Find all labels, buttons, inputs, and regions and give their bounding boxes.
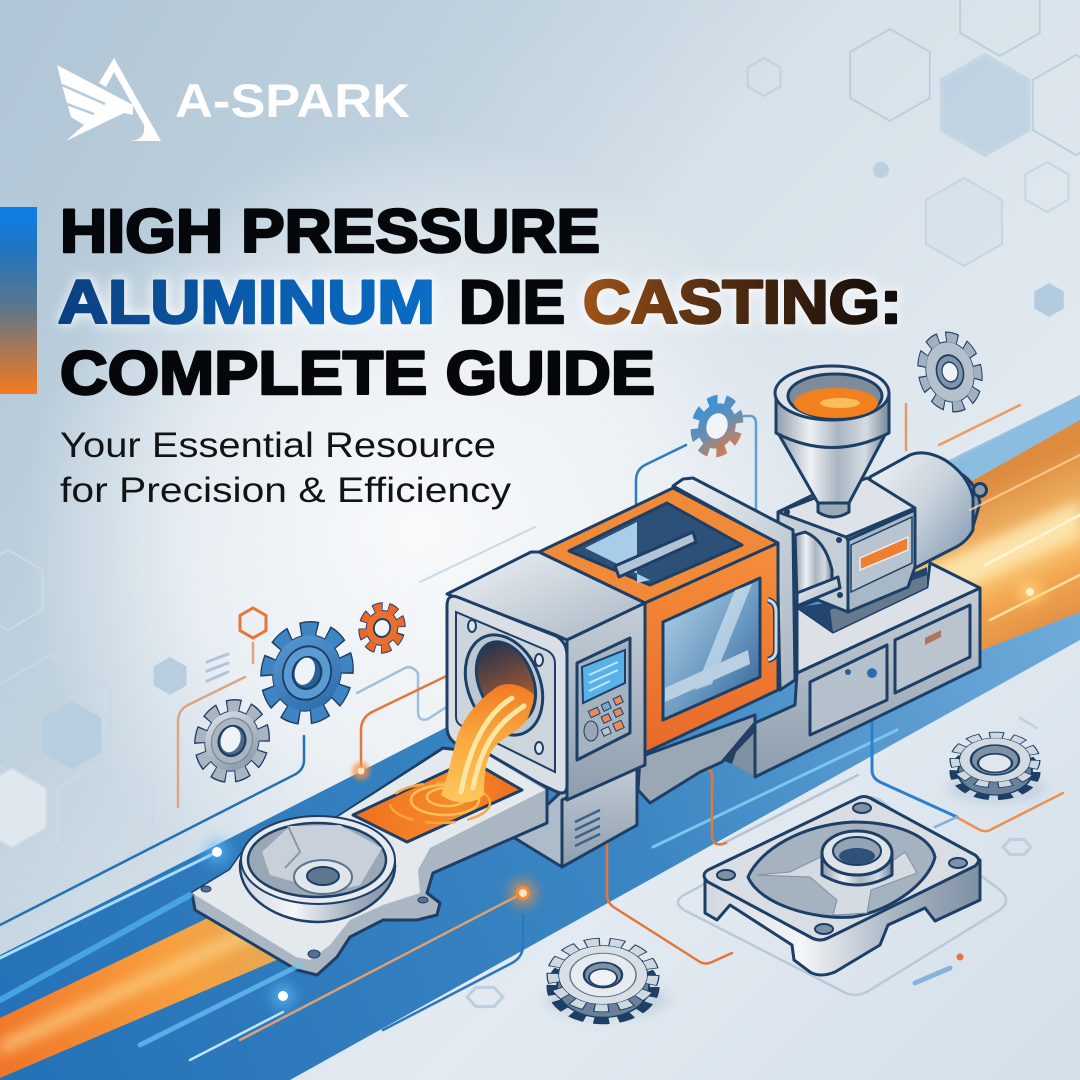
- gear: right flat: [947, 735, 1047, 803]
- bolt holes: [717, 803, 967, 934]
- ring boss: [294, 860, 352, 894]
- body side: [705, 860, 980, 975]
- title: ALUMINUM: [58, 268, 435, 336]
- base front face: [755, 588, 980, 777]
- upper rod: [615, 532, 696, 577]
- orange plate: [860, 537, 908, 570]
- side window: [663, 578, 760, 720]
- molten pool: [353, 760, 522, 842]
- subtitle: [60, 426, 512, 510]
- base panel left: [810, 645, 887, 735]
- window: [748, 822, 935, 917]
- title: CASTING:: [583, 268, 902, 336]
- ring wall: [240, 818, 395, 922]
- logo wordmark: A-SPARK: [175, 74, 410, 127]
- cube top: [778, 478, 915, 537]
- block side: [567, 603, 645, 800]
- logo mark: [57, 58, 161, 141]
- frame side face: [645, 543, 778, 753]
- bolt holes: [468, 620, 543, 754]
- machine: back cap: [673, 478, 795, 690]
- machine: left block: [447, 552, 645, 800]
- title: CASTING:: [583, 268, 901, 336]
- title: ALUMINUM: [60, 268, 435, 336]
- machine: pedestal: [513, 763, 637, 867]
- hopper cone: [778, 433, 886, 503]
- molten metal pour: [441, 684, 534, 802]
- plate top: [192, 750, 545, 960]
- guide outline: [678, 798, 1006, 995]
- dark shadow: [797, 567, 927, 632]
- block top: [447, 552, 645, 640]
- subtitle: Your Essential Resource: [60, 426, 496, 465]
- title: COMPLETE GUIDE: [60, 339, 655, 407]
- gear: orange small: [358, 602, 406, 654]
- buttons: [584, 696, 624, 741]
- machine: orange frame: [539, 488, 778, 753]
- motor cap: [953, 470, 980, 530]
- motor cylinder: [870, 453, 973, 590]
- cube right face: [848, 510, 915, 612]
- base top face: [797, 563, 980, 673]
- gear: top right: [915, 331, 985, 413]
- callout lines: [0, 404, 1063, 1040]
- swirl: [390, 783, 490, 823]
- diagonal speed bands: [0, 395, 1080, 1080]
- light streaks and glow points: [0, 455, 1080, 1060]
- gear: bottom flat: [545, 942, 669, 1020]
- accent bar: [0, 207, 37, 394]
- block front: [447, 596, 567, 793]
- background hexagons: left: [0, 550, 186, 870]
- under-beam: [638, 715, 755, 803]
- barrel: [795, 532, 832, 600]
- title: DIE: [459, 268, 565, 336]
- base panel right: [895, 605, 970, 693]
- machine: injection unit: [775, 366, 986, 632]
- icon: small hexagons: [240, 608, 1034, 1011]
- hopper neck: [818, 497, 849, 517]
- subtitle: for Precision & Efficiency: [60, 471, 512, 510]
- background hexagons: top right: [748, 0, 1080, 317]
- control panel: [577, 638, 630, 760]
- plate body: [192, 748, 547, 975]
- boss: [822, 853, 892, 885]
- top: [704, 796, 978, 940]
- title: [58, 197, 902, 407]
- top window: [569, 503, 742, 585]
- title: HIGH PRESSURE: [60, 197, 600, 265]
- gear: grey: [192, 698, 272, 784]
- gear: blue large: [257, 619, 357, 727]
- machine: base: [638, 563, 980, 803]
- lower rod: [665, 650, 750, 702]
- plate bolt holes: [201, 886, 211, 892]
- frame top face: [539, 488, 778, 603]
- molten metal in hopper: [794, 388, 878, 418]
- die opening ring: [451, 623, 557, 747]
- screen: [582, 650, 625, 703]
- logo: A-SPARK: [57, 58, 410, 141]
- hopper cylinder: [776, 393, 889, 448]
- gear: blue to orange: [688, 394, 746, 458]
- door handle: [768, 600, 776, 660]
- cube left plate: [778, 493, 848, 612]
- hopper rim: [775, 366, 889, 420]
- casting part 1 with tray: [192, 748, 547, 975]
- casting part 2: [678, 796, 1006, 995]
- rod: [797, 577, 840, 606]
